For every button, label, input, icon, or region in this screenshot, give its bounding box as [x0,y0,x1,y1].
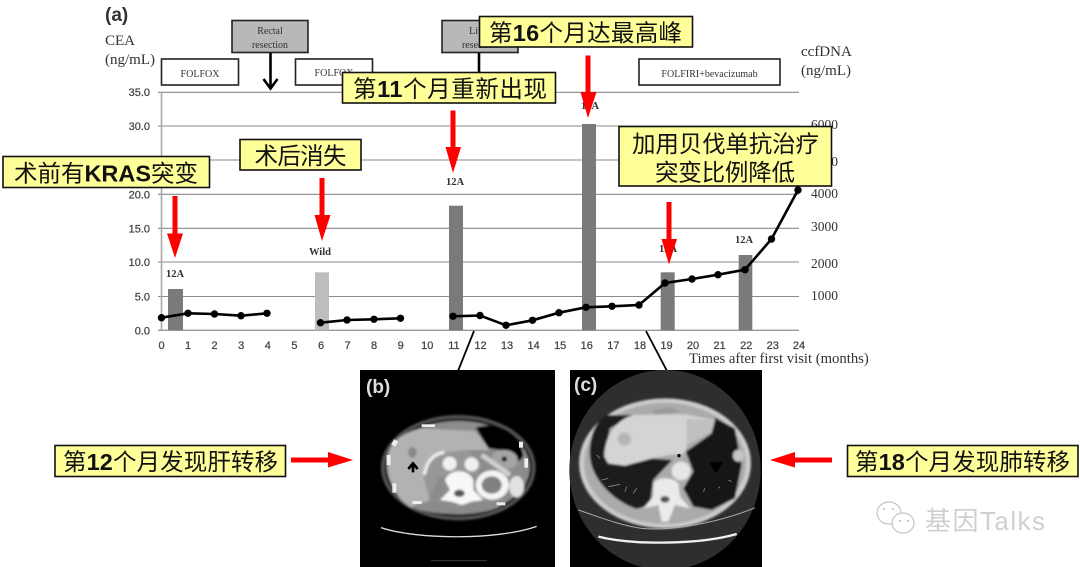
right axis tick labels: 2000 [811,256,838,271]
treatment box: FOLFOX second [296,59,372,85]
month tick labels: 20 [687,340,699,352]
callout: 加用贝伐单抗治疗 突变比例降低: 加用贝伐单抗治疗 [632,131,819,157]
surgery box: liver resection: resection [462,40,498,51]
callout: 第18个月发现肺转移: 第18个月发现肺转移 [855,449,1070,475]
left axis tick labels: 20.0 [129,190,150,202]
arrow: rectal resection [264,53,278,89]
treatment box: FOLFOX: FOLFOX [181,69,220,80]
surgery box: rectal resection [232,20,308,52]
month tick labels: 1 [185,340,191,352]
left axis tick labels: 35.0 [129,87,150,99]
month tick labels: 10 [421,340,433,352]
right axis tick labels: 4000 [811,186,838,201]
right axis tick labels [811,117,838,303]
mutation labels: Wild [309,247,331,258]
ribs [387,424,528,505]
panel label (a): (a) [105,5,128,26]
left axis title: (ng/mL) [105,52,155,68]
red arrow: 肝转移 [291,452,353,468]
label (b): (b) [366,377,390,398]
left axis tick labels: 30.0 [129,121,150,133]
mutation labels: 12A [581,101,599,112]
month tick labels: 3 [238,340,244,352]
month tick labels: 11 [448,340,460,352]
treatment box: FOLFIRI+bevacizumab: FOLFIRI+bevacizumab [661,69,758,80]
month tick labels: 18 [634,340,646,352]
month tick labels: 7 [345,340,351,352]
arrow in scan [709,462,723,473]
right axis title: ccfDNA [801,44,852,60]
callout: 术后消失: 术后消失 [254,143,346,169]
mutation labels [166,101,753,280]
month tick labels: 14 [527,340,540,352]
right axis tick labels: 5000 [811,154,838,169]
left axis tick labels [129,87,150,338]
callout: 第12个月发现肝转移: 第12个月发现肝转移 [63,449,278,475]
red arrow: 肺转移 [770,452,832,468]
surgery box: liver resection [442,20,518,73]
callout: 术前有KRAS突变: 术前有KRAS突变 [14,160,198,186]
red arrow: 第19个月 [662,202,677,264]
icon: WeChat bubbles [877,502,914,533]
month tick labels: 15 [554,340,566,352]
right axis tick labels: 1000 [811,288,838,303]
mutation labels: 12A [166,269,184,280]
month tick labels: 6 [318,340,324,352]
callout: 第11个月重新出现: 第11个月重新出现 [353,76,547,102]
month tick labels: 8 [371,340,377,352]
month tick labels: 0 [158,340,165,352]
red arrow: 第11个月 [446,110,461,173]
month tick labels [158,340,805,352]
month tick labels: 17 [607,340,620,352]
mutation labels: 12A [735,235,753,246]
treatment box: FOLFIRI+bevacizumab [639,59,780,85]
right axis tick labels: 3000 [811,219,838,234]
month tick labels: 4 [265,340,271,352]
connector lines to CT scans [458,331,667,371]
red arrow: 术前 [167,196,183,258]
right axis tick labels: 6000 [811,117,838,132]
month tick labels: 2 [212,340,218,352]
left axis tick labels: 10.0 [129,257,150,269]
x axis title: Times after first visit (months) [689,351,869,367]
callout: 第16个月达最高峰: 第16个月达最高峰 [489,20,682,46]
right axis title: (ng/mL) [801,63,851,79]
month tick labels: 9 [398,340,404,352]
treatment box: FOLFOX second: FOLFOX [315,68,354,79]
callout: 术后消失 [240,140,361,170]
callout: 加用贝伐单抗治疗 突变比例降低: 突变比例降低 [655,160,795,186]
surgery box: rectal resection: resection [252,40,288,51]
CT scan (b): liver metastasis [360,370,555,567]
ccfDNA line [162,190,798,325]
left axis tick labels: 15.0 [129,224,150,236]
arrow in scan [408,463,418,472]
grid lines and axes [158,92,799,330]
mutation labels: 12A [659,244,677,255]
watermark: 基因Talks: 基因Talks [925,506,1045,536]
watermark: 基因Talks [877,502,1045,536]
ccfDNA data points [158,186,802,329]
mutation labels: 12A [446,177,464,188]
surgery box: liver resection: Liver [469,26,491,37]
month tick labels: 21 [713,340,726,352]
label (c): (c) [574,375,597,396]
left axis title: CEA [105,33,135,49]
red arrow: 术后 [314,178,330,241]
month tick labels: 19 [660,340,673,352]
CEA bars [168,124,752,330]
month tick labels: 12 [474,340,487,352]
treatment box: FOLFOX [162,59,238,85]
left axis tick labels: 0.0 [135,326,150,338]
left axis tick labels: 25.0 [129,155,150,167]
CT scan (c): lung metastasis [569,370,762,567]
month tick labels: 16 [581,340,593,352]
callout: 加用贝伐单抗治疗 突变比例降低 [619,126,832,186]
left axis tick labels: 5.0 [135,292,150,304]
month tick labels: 24 [793,340,805,352]
month tick labels: 13 [501,340,513,352]
chart: CEA and ccfDNA timeline [105,5,869,367]
month tick labels: 22 [740,340,752,352]
red arrow: 第16个月 [580,56,596,118]
surgery box: rectal resection: Rectal [257,26,283,37]
month tick labels: 23 [767,340,779,352]
month tick labels: 5 [291,340,297,352]
